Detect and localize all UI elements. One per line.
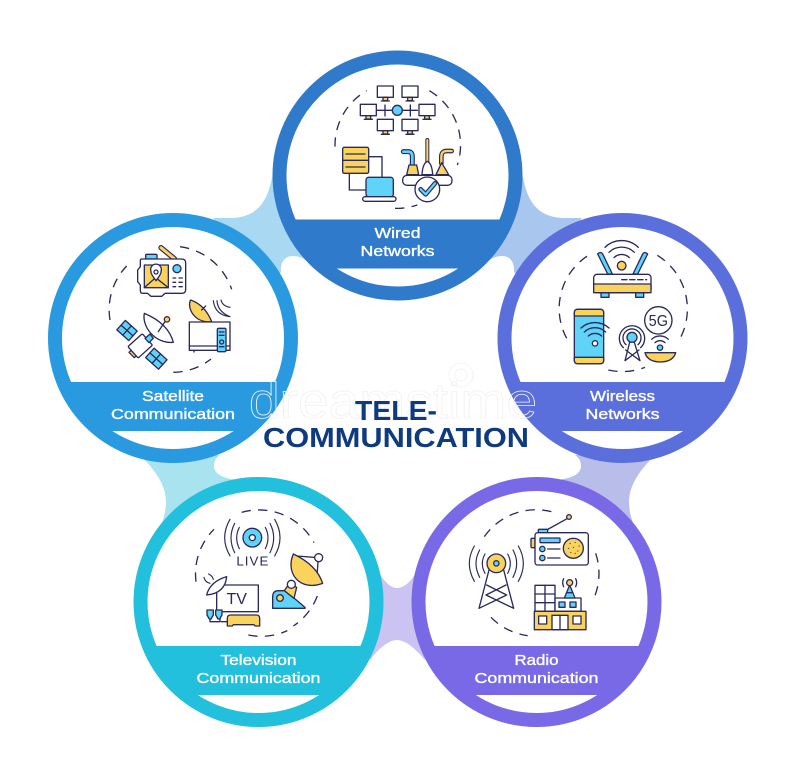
ring and band	[502, 220, 742, 456]
label: wired networks	[360, 226, 434, 260]
label: satellite communication: Communication	[111, 407, 235, 423]
label: television communication	[196, 653, 320, 687]
icon: wired network	[335, 86, 461, 208]
icon: satellite	[109, 247, 232, 372]
icon: television: LIVE	[236, 553, 268, 568]
label: wireless networks: Wireless	[590, 389, 655, 405]
label: satellite communication	[111, 389, 235, 423]
ring and band	[278, 58, 518, 294]
title: COMMUNICATION	[263, 422, 529, 453]
icon: radio	[469, 510, 599, 636]
watermark: dreamstime	[249, 373, 537, 429]
label: satellite communication: Satellite	[142, 389, 204, 405]
panel: radio communication	[416, 484, 656, 720]
panel: wireless networks	[502, 220, 742, 456]
icon: wireless network	[559, 241, 687, 372]
ring and band	[53, 220, 293, 456]
label: wired networks: Wired	[374, 226, 420, 242]
panel: television communication	[138, 484, 378, 720]
connector: wireless to radio	[555, 455, 655, 540]
label: wired networks: Networks	[360, 244, 434, 260]
label: wireless networks: Networks	[586, 407, 660, 423]
icon: television: TV	[226, 591, 247, 608]
title	[263, 395, 529, 453]
ring and band	[138, 484, 378, 720]
panel: satellite communication	[53, 220, 293, 456]
label: television communication: Television	[220, 653, 296, 669]
panel: wired networks	[278, 58, 518, 294]
connector: satellite to wired	[213, 177, 330, 290]
ring and band	[416, 484, 656, 720]
label: radio communication: Communication	[474, 671, 598, 687]
connector: satellite to television	[140, 455, 240, 540]
label: television communication: Communication	[196, 671, 320, 687]
icon: television	[196, 510, 323, 636]
title: TELE-	[355, 395, 437, 426]
connector: television to radio	[370, 565, 425, 660]
label: wireless networks	[586, 389, 660, 423]
label: radio communication	[474, 653, 598, 687]
label: radio communication: Radio	[514, 653, 558, 669]
icon: wireless network: 5G	[649, 313, 668, 330]
connector: wired to wireless	[465, 177, 582, 290]
